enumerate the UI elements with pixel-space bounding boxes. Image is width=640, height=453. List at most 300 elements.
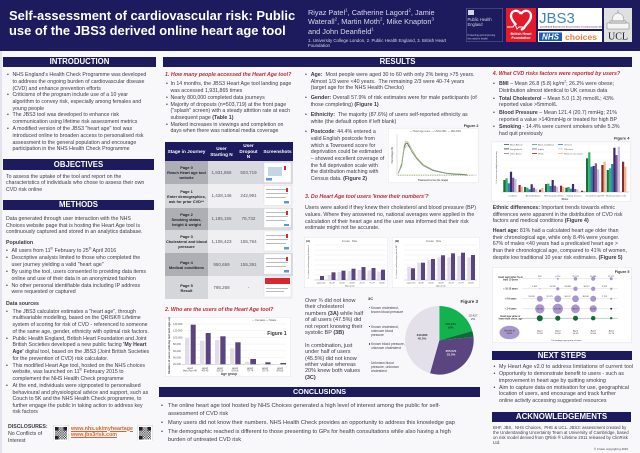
figure 3A: bar chart: 60-69 bbox=[349, 282, 355, 284]
figure 2: line chart: Figure 2 bbox=[464, 124, 478, 128]
table 1: 795,268 bbox=[213, 285, 230, 290]
figure 3B: bar chart: 40-49 bbox=[418, 282, 424, 284]
text: ethnic differences and heart age bbox=[492, 205, 627, 261]
figure 1: bar chart: 40-49 bbox=[202, 369, 209, 373]
table 1: 155,391 bbox=[240, 262, 257, 267]
figure 5: bubble chart: 52,575 bbox=[546, 296, 553, 298]
text: question 4 bullets: had quit previously bbox=[499, 131, 543, 137]
table 1: Page 3 bbox=[180, 234, 193, 239]
figure 1: bar chart: 60,000 bbox=[173, 349, 181, 353]
text: ethnic differences and heart age: Heart age: 81% had a calculated heart age older than bbox=[493, 228, 618, 234]
text: postcode: the distribution matching with bbox=[311, 169, 378, 175]
text: question 3 intro: calculation of their heart age and the user was informed that their risk bbox=[305, 219, 469, 225]
text: next steps bullets: My Heart Age v2.0 to address limitations of current tool bbox=[499, 364, 633, 370]
figure 1: bar chart: aged bbox=[187, 367, 193, 370]
figure 5: bubble chart: 30-39 bbox=[536, 333, 543, 335]
figure 1: bar chart: aged bbox=[277, 367, 283, 370]
text: introduction bullets: young people bbox=[12, 106, 44, 112]
text: question 1 bullets: ("splash" screen) with a steady attrition rate at each bbox=[170, 108, 290, 114]
text: ethnic differences and heart age: than their chronological age, compared to 41% of women, bbox=[493, 248, 627, 254]
text: question 1 bullets: Marked increases in viewings and completion on bbox=[170, 122, 283, 128]
text: next steps bullets: location of users, and encourage and track further bbox=[499, 391, 616, 397]
heading: next steps bbox=[492, 351, 632, 360]
figure 4: bar chart: White or not stated bbox=[564, 152, 583, 156]
figure 5: bubble chart: 70-74 bbox=[608, 333, 614, 335]
figure 3C: legend: 3C bbox=[368, 296, 373, 301]
text: disclosures: No Conflicts of bbox=[8, 431, 42, 437]
text: objectives: characteristics of individuals who chose to assess their own bbox=[6, 180, 144, 186]
text: know your numbers: systolic BP (3B) bbox=[305, 330, 344, 336]
text: postcode: Postcode: 44.4% entered a bbox=[311, 129, 376, 135]
figure 5: bubble chart: + 1-4 years bbox=[504, 307, 517, 310]
figure 1: bar chart: 50-59 bbox=[217, 369, 224, 373]
figure 5: bubble chart: Aged bbox=[572, 330, 578, 332]
text: question 4 bullets bbox=[493, 80, 620, 137]
text: methods: were requested or captured bbox=[12, 289, 76, 295]
figure 3C: legend: Known blood pressure, bbox=[371, 342, 405, 346]
authors: Riyaz Patel1, Catherine Lagord2, Jamie bbox=[308, 8, 435, 17]
text: question 3 intro: values. Where they answered no, national averages were applied in the bbox=[305, 212, 474, 218]
title: Self-assessment of cardiovascular risk: Public bbox=[9, 8, 295, 23]
text: introduction bullets: introduced online to broaden access to personalised risk bbox=[12, 133, 144, 139]
figure 5: bubble chart: 40-49 bbox=[554, 333, 561, 335]
copyright: © Crown copyright ig 2016 bbox=[594, 447, 628, 451]
text: conclusions bullets: The online heart age tool hosted by NHS Choices generated a high level of interest among the public for self- bbox=[168, 403, 440, 409]
text: next steps bullets: Aim to capture data on motivation for use, geographical bbox=[499, 385, 629, 391]
text: methods: At the end, individuals were signposted to personalised bbox=[12, 383, 141, 389]
affiliations: 1. University College London, 2. Public Health England, 3. British Heart bbox=[308, 38, 446, 43]
figure 5: bubble chart: 22,175 bbox=[608, 276, 615, 278]
figure 1: bar chart: Age group bbox=[221, 372, 237, 376]
text: methods: of the same age, gender, ethnicity with optimal risk factors. bbox=[12, 329, 149, 335]
text: methods: Descriptive analysis limited to those who completed the bbox=[12, 255, 140, 261]
figure 3B: bar chart: aged <40 bbox=[407, 281, 416, 284]
text: know your numbers: 20% knew both values bbox=[305, 368, 360, 374]
figure 3B: bar chart: 80-85 bbox=[468, 282, 474, 284]
logo: Public Health England bbox=[466, 8, 503, 42]
text: introduction bullets: NHS England's Health Check Programme was developed bbox=[12, 72, 146, 78]
text: next steps bullets: online activity accessing suggested resources bbox=[499, 398, 606, 404]
text: postcode: – showed excellent coverage of bbox=[311, 156, 384, 162]
figure 5: bubble chart: 2,795 bbox=[601, 296, 607, 298]
text: question 4 bullets: Smoking - 14.4% were current smokers while 5.3% bbox=[499, 124, 620, 130]
text: question 1 bullets: Nearly 800,000 completed data journeys bbox=[170, 95, 265, 101]
text: question 4 bullets: reported value >5mmol/L bbox=[499, 102, 557, 108]
text: methods: Age' digital tool, based on the JBS3 (Joint British Societies bbox=[12, 349, 149, 355]
text: acknowledgements: the Understanding Uncertainty Team at University of Cambridge, based bbox=[493, 430, 629, 435]
logo: British Heart Foundation: Foundation bbox=[511, 36, 530, 40]
text: conclusions bullets: Many users did not know their numbers. NHS Health Check provides an opportunity to address this knowledge gap bbox=[168, 420, 455, 426]
table 1: 503,719 bbox=[240, 170, 257, 175]
text: methods: multivariable modelling, based on the QRISK® Lifetime bbox=[12, 315, 141, 321]
logo: British Heart Foundation bbox=[506, 8, 536, 42]
figure 3C: pie chart: 145,221 bbox=[445, 322, 456, 326]
text: disclosures: DISCLOSURES: bbox=[8, 424, 48, 430]
figure 3C: pie chart: Figure 3 bbox=[460, 299, 478, 304]
logo: JBS3 bbox=[538, 8, 602, 29]
text: introduction bullets: assessment to the general population and encourage bbox=[12, 140, 136, 146]
text: know your numbers: (45.5%) did not know bbox=[305, 356, 357, 362]
text: acknowledgements: on risk model derived from QRisk ® Lifetime 2011 released by ClinRisk bbox=[493, 435, 628, 440]
figure 3C: legend bbox=[368, 296, 405, 372]
heading: methods bbox=[3, 200, 154, 210]
figure 5: bubble chart: Aged bbox=[590, 330, 595, 332]
logo: Public Health England: Public Health bbox=[468, 17, 492, 22]
table 1: 950,659 bbox=[213, 262, 230, 267]
text: introduction bullets: participation in the NHS Health Check Programme bbox=[12, 146, 130, 152]
logo: NHS choices bbox=[538, 31, 602, 42]
text: ethnic differences and heart age: differences were apparent in the distribution of CVD risk bbox=[493, 212, 622, 218]
text: disclosures: Interest bbox=[8, 438, 26, 444]
figure 5: bubble chart: 109,981 bbox=[554, 308, 562, 310]
table 1: Page 4 bbox=[180, 260, 193, 264]
figure 4: bar chart: Risks bbox=[562, 198, 569, 201]
figure 5: bubble chart: Aged bbox=[608, 330, 613, 332]
logo: Public Health England: Protecting and improving bbox=[468, 34, 496, 37]
text: acknowledgements: Ltd. bbox=[493, 440, 500, 445]
figure 3B: bar chart: 75-79 bbox=[458, 282, 464, 284]
figure 1: bar chart: 40,000 bbox=[173, 356, 181, 360]
text: introduction bullets: algorithm to convey risk, especially among females and bbox=[12, 99, 141, 105]
figure 4: bar chart: % of users reporting/experiencing bbox=[495, 151, 498, 184]
text: ethnic differences and heart age: factors and medical conditions (Figure 4) bbox=[493, 218, 589, 224]
title: use of the JBS3 derived online heart age tool bbox=[9, 23, 286, 38]
figure 5: bubble chart: 86,735 bbox=[536, 308, 543, 310]
figure 5: bubble chart: 30,517 bbox=[583, 286, 590, 288]
icon: QR code right bbox=[137, 425, 153, 441]
text: age, gender, ethnicity: Age: Most people were aged 30 to 60 with only 2% being >75 years. bbox=[311, 72, 475, 78]
text: methods: complement the NHS Health Check programme bbox=[12, 376, 124, 382]
text: conclusions bullets bbox=[161, 403, 455, 443]
text: conclusions bullets: assessment of CVD risk bbox=[168, 411, 228, 417]
text: next steps bullets: improvement in heart age by quitting smoking bbox=[499, 378, 606, 384]
figure 4: bar chart: Kidney disease bbox=[567, 196, 582, 198]
figure 3A: bar chart: 75-79 bbox=[369, 282, 375, 284]
figure 5: bubble chart: 56,137 bbox=[564, 296, 571, 298]
heading: introduction: INTRODUCTION bbox=[50, 57, 109, 66]
table 1: Page 2 bbox=[180, 212, 193, 216]
heading: acknowledgements: ACKNOWLEDGEMENTS bbox=[516, 412, 607, 421]
figure 5: bubble chart: 22,573 bbox=[572, 276, 579, 278]
figure 3C: pie chart: 343,880 bbox=[417, 333, 427, 337]
authors bbox=[308, 8, 435, 36]
text: question 4 bullets: Blood Pressure – Mean 121.4 (20.7) mmHg; 21% bbox=[499, 110, 617, 116]
text: question 3 intro: estimate might not be accurate. bbox=[305, 225, 380, 231]
figure 4: bar chart: Bangladeshi bbox=[510, 149, 523, 151]
text: question 1 bullets: was accessed 1,931,865 times bbox=[170, 88, 242, 94]
icon: QR code left bbox=[53, 425, 69, 441]
table 1: User bbox=[216, 146, 227, 151]
text: question 1 bullets: Majority of dropouts (n=503,719) at the front page bbox=[170, 102, 286, 108]
table 1: Stage in Journey bbox=[168, 149, 205, 154]
text: know your numbers: under half of users bbox=[305, 349, 351, 355]
text: ethnic differences and heart age: their chronological age, while only 8.4% were younger. bbox=[493, 235, 619, 241]
figure 1: bar chart: less than 40 bbox=[183, 369, 198, 373]
figure 1: bar chart: aged bbox=[202, 367, 208, 370]
logo: NHS choices: choices bbox=[565, 32, 597, 42]
text: postcode: Census data. (Figure 2) bbox=[311, 176, 367, 182]
figure 3C: pie chart: 33.5% bbox=[447, 353, 456, 357]
figure 2: line chart: Percentage (%) bbox=[391, 146, 394, 163]
table 1: Page 0 bbox=[180, 165, 193, 170]
figure 4: bar chart: Matching Statin CVD bbox=[606, 194, 627, 198]
table 1: Starting N bbox=[210, 152, 233, 156]
figure 3A: bar chart: (A) bbox=[306, 239, 310, 243]
figure 3C: pie chart: 15,427 bbox=[468, 314, 478, 318]
figure 5: bubble chart: 2,305 bbox=[531, 286, 537, 288]
text: ethnic differences and heart age: Ethnic differences: Important trends towards ethnic bbox=[493, 205, 615, 211]
figure 3A: bar chart: Female Male bbox=[342, 240, 358, 243]
text: question 4 bullets: Distribution almost identical to UK census data bbox=[499, 88, 607, 94]
table 1: 155,764 bbox=[240, 239, 257, 244]
table screenshots bbox=[264, 162, 292, 298]
table 1 bbox=[165, 142, 293, 299]
links: www.nhs.uk/myheartage bbox=[71, 426, 133, 432]
text: age, gender, ethnicity: white (the default option if left blank) bbox=[311, 119, 396, 125]
figure 3B: bar chart: % of users not knowing systolic BP bbox=[395, 244, 398, 279]
figure 5: bubble chart: 842 bbox=[538, 276, 542, 278]
text: objectives bbox=[6, 174, 144, 193]
text: know your numbers: of all users (47.5%) did bbox=[305, 317, 361, 323]
text: methods: This modified Heart Age tool, hosted on the NHS choices bbox=[12, 363, 145, 369]
text: age, gender, ethnicity: Almost 1/3 were <40 years. The remaining 2/3 were 40-74 years bbox=[311, 79, 464, 85]
text: age, gender, ethnicity: Ethnicity: The majority (87.6%) of users self-reported ethnicity as bbox=[311, 112, 468, 118]
text: conclusions bullets: The demographic reached is different to those presenting to GPs for health consultations while also having a high bbox=[168, 429, 451, 435]
table 1: Cholesterol and blood bbox=[166, 239, 207, 244]
affiliations: Foundation bbox=[308, 43, 330, 48]
left edge strip bbox=[0, 51, 2, 453]
figure 3B: bar chart: Female Male bbox=[426, 240, 442, 243]
text: methods: All users from 11th February to 25th April 2016 bbox=[12, 246, 116, 254]
text: postcode: valid English postcode from bbox=[311, 136, 375, 142]
logo: Public Health England: England bbox=[468, 22, 483, 27]
text: conclusions bullets: burden of untreated CVD risk bbox=[168, 437, 241, 443]
heading: results: RESULTS bbox=[380, 57, 415, 66]
text: objectives: CVD risk online bbox=[6, 187, 42, 193]
figure 5: bubble chart: 60-69 bbox=[590, 333, 596, 335]
figure 3C: legend: Unknown blood bbox=[371, 360, 394, 364]
table 1: 1,106,423 bbox=[211, 239, 232, 244]
figure 3C: pie chart: 19% bbox=[447, 326, 454, 330]
text: introduction bullets: to address the ongoing burden of cardiovascular disease bbox=[12, 79, 144, 85]
text: methods: website, was launched on 11th February 2015 to bbox=[12, 368, 124, 375]
figure 3B: bar chart: 60-69 bbox=[438, 282, 444, 284]
text: next steps bullets: Opportunity to demonstrate benefit to users - such as bbox=[499, 371, 624, 377]
figure 5: bubble chart: Aged bbox=[555, 330, 560, 332]
figure 4: bar chart: Pakistani bbox=[564, 148, 573, 151]
figure 5: bubble chart: Number of bbox=[504, 330, 514, 332]
text: question 1 bullets: subsequent page (Table 1) bbox=[170, 115, 233, 121]
table 1: - bbox=[248, 285, 249, 290]
text: question 3 intro: Users were asked if they knew their cholesterol and blood pressure (BP) bbox=[305, 205, 476, 211]
figure 1: bar chart: Figure 1 bbox=[267, 331, 287, 337]
table 1: Enter demographics, bbox=[167, 194, 206, 198]
figure 5: bubble chart bbox=[492, 267, 632, 343]
heading: next steps: NEXT STEPS bbox=[538, 351, 586, 360]
text: question 1 bullets: In 14 months, the JBS3 Heart Age tool landing page bbox=[170, 81, 291, 87]
text: question 4 bullets: reported a value >140mmHg or treated for high BP bbox=[499, 117, 617, 123]
figure 4: bar chart: Black Caribbean bbox=[538, 144, 555, 146]
figure 5: bubble chart: 24,688 bbox=[564, 286, 571, 288]
text: know your numbers bbox=[305, 298, 364, 381]
table 1: Page 5 bbox=[180, 282, 193, 288]
figure 3C: legend: Known cholesterol, bbox=[371, 324, 399, 328]
logo: JBS3: JBS3 bbox=[539, 10, 575, 27]
table 1: website bbox=[179, 175, 194, 180]
question 3 heading: 3. Do Heart Age tool users 'know their numbers'? bbox=[305, 194, 429, 200]
text: next steps bullets bbox=[494, 364, 633, 404]
affiliations bbox=[308, 38, 446, 48]
text: introduction bullets bbox=[7, 72, 146, 152]
text: methods: By using the tool, users consented to providing data items bbox=[12, 269, 146, 275]
text: question 1 bullets bbox=[166, 81, 292, 134]
text: ethnic differences and heart age: 67% of males <40 years had a predicated heart age > bbox=[493, 241, 618, 247]
figure 4: bar chart: Atrial fibrillation bbox=[526, 194, 541, 198]
figure 4: bar chart: Black African bbox=[510, 144, 523, 146]
figure 3B: bar chart: (B) bbox=[395, 239, 399, 243]
text: introduction bullets: (CVD) and enhance prevention efforts bbox=[12, 86, 101, 92]
table 1: height & weight bbox=[172, 222, 201, 226]
figure 3C: legend: known blood pressure bbox=[371, 310, 403, 314]
text: methods: British Societies developed a new public facing 'My Heart bbox=[12, 342, 147, 348]
figure 5: bubble chart: 50,765 bbox=[590, 308, 597, 310]
figure 3C: pie chart: 255,521 bbox=[446, 349, 456, 353]
text: age, gender, ethnicity: (target age for the NHS Health Checks) bbox=[311, 85, 404, 91]
text: know your numbers: their cholesterol bbox=[305, 304, 344, 310]
figure 4: bar chart: Treated for high BP bbox=[586, 194, 605, 198]
figure 5: bubble chart: 13,700 bbox=[549, 286, 556, 288]
figure 3B: bar chart: 50-59 bbox=[428, 282, 434, 284]
figure 3A: bar chart: % of users not knowing cholesterol bbox=[307, 245, 310, 279]
table 1: 78,732 bbox=[242, 216, 255, 221]
text: age, gender, ethnicity: those completing) (Figure 1) bbox=[311, 102, 379, 108]
figure 4: bar chart bbox=[492, 136, 631, 202]
text: know your numbers: In combination, just bbox=[305, 343, 352, 349]
text: methods: Couch to 5K and the NHS Health Check programme, to bbox=[12, 396, 141, 402]
text: methods: Population bbox=[6, 240, 33, 246]
figure 5: bubble chart: Figure 5 bbox=[614, 270, 629, 274]
figure 3B: bar chart: Age group bbox=[436, 284, 447, 288]
text: methods: Public Health England, British Heart Foundation and Joint bbox=[12, 336, 146, 342]
table 1: Dropout bbox=[239, 149, 258, 154]
figure 1: bar chart: aged bbox=[247, 367, 253, 370]
figure 5: bubble chart: users bbox=[506, 332, 513, 335]
table 1: Smoking status, bbox=[171, 216, 202, 222]
text: question 3 intro bbox=[305, 205, 476, 231]
question 1 heading: 1. How many people accessed the Heart Age tool? bbox=[165, 72, 291, 78]
table 1: User bbox=[243, 143, 254, 148]
figure 4: bar chart: Rheumatoid arthritis bbox=[544, 194, 565, 198]
figure 2: line chart: Townsend score (in range) bbox=[418, 179, 448, 182]
figure 3A: bar chart: 80-85 bbox=[379, 282, 385, 284]
figure 5: bubble chart: 26,386 bbox=[590, 276, 597, 278]
figure 1: bar chart: 100,000 bbox=[173, 335, 183, 339]
text: know your numbers: either value whereas bbox=[305, 362, 356, 368]
text: methods: continuously captured and stored in an analytics database. bbox=[6, 229, 143, 235]
figure 3C: pie chart: 45.5% bbox=[418, 337, 427, 341]
logo: NHS choices: NHS bbox=[542, 32, 559, 41]
text: know your numbers: Over ¾ did not know bbox=[305, 298, 355, 304]
figure 5: bubble chart: 50-59 bbox=[572, 333, 579, 335]
figure 1: bar chart: aged bbox=[232, 367, 238, 370]
table 1: Result bbox=[181, 288, 192, 292]
table 1: Reach Heart age tool bbox=[167, 170, 206, 175]
heading: acknowledgements bbox=[492, 412, 631, 422]
text: postcode: the full deprivation scale with bbox=[311, 163, 378, 169]
logo: British Heart Foundation: British Heart bbox=[510, 32, 532, 36]
text: methods: Data sources bbox=[6, 301, 39, 307]
text: methods: online and use of their data in an anonymized fashion bbox=[12, 276, 136, 282]
figure 5: bubble chart: 29,059 bbox=[528, 296, 535, 298]
figure 5: bubble chart: lower than chron. age bbox=[498, 317, 523, 320]
text: methods: The JBS3 calculator estimates a "heart age", through bbox=[12, 309, 136, 315]
figure 1: bar chart: Number of users utilising tool and sign-up* bbox=[167, 317, 171, 374]
heading: objectives: OBJECTIVES bbox=[54, 160, 103, 169]
figure 1: bar chart: 120,000 bbox=[173, 329, 183, 333]
text: methods: further engage the public in taking action to address key bbox=[12, 403, 143, 409]
figure 1: bar chart: aged bbox=[217, 367, 223, 370]
text: acknowledgements: BHF, JBS, NHS Choices, PHE & UCL. JBS3: assessment created by bbox=[493, 425, 626, 430]
text: introduction bullets: The JBS3 tool was developed to enhance risk bbox=[12, 112, 119, 118]
table 1: N bbox=[247, 154, 250, 159]
text: postcode bbox=[305, 129, 384, 182]
text: objectives: To assess the uptake of the tool and report on the bbox=[6, 174, 121, 180]
figure 4: bar chart: Figure 4 bbox=[614, 136, 630, 140]
text: ethnic differences and heart age: despite low traditional 10 year risk estimates. (Figure 5) bbox=[493, 255, 623, 261]
table 1: ask for prior CVD** bbox=[169, 198, 204, 204]
text: know your numbers: not report knowing their bbox=[305, 324, 362, 330]
table 1: 1,931,865 bbox=[211, 170, 232, 175]
figure 3C: pie chart: 2% bbox=[471, 317, 475, 321]
figure 3C: legend: pressure, unknown bbox=[371, 364, 399, 368]
heading: methods: METHODS bbox=[59, 200, 98, 209]
figure 3B: bar chart bbox=[392, 237, 480, 288]
figure 1: bar chart: 80,000 bbox=[173, 342, 181, 346]
question 2 heading: 2. Who are the users of the Heart Age tool? bbox=[165, 307, 273, 313]
heading: introduction bbox=[3, 57, 156, 67]
table 1: Screenshots bbox=[263, 149, 292, 154]
figure 5: bubble chart: 4,170 bbox=[555, 276, 561, 278]
text: introduction bullets: A modified version of the JBS3 "heart age" tool was bbox=[12, 126, 132, 132]
text: age, gender, ethnicity bbox=[305, 72, 477, 125]
figure 1: bar chart: 75-79 bbox=[262, 369, 269, 373]
table 1: 1,428,146 bbox=[211, 193, 232, 198]
text: postcode: which a Townsend score for bbox=[311, 143, 375, 149]
table 1: Medical conditions bbox=[169, 264, 204, 270]
text: know your numbers: numbers (3A) while half bbox=[305, 311, 363, 317]
logo: UCL bbox=[604, 8, 632, 42]
figure 5: bubble chart: + 5-9 years bbox=[504, 298, 517, 300]
figure 5: bubble chart: 38,108 bbox=[582, 296, 589, 298]
figure 4: bar chart: Diabetes bbox=[509, 194, 518, 198]
figure 5: bubble chart: + 10-15 years bbox=[503, 288, 518, 290]
text: introduction bullets: Criticisms of the program include use of a 10 year bbox=[12, 92, 128, 98]
text: methods: Data generated through user interaction with the NHS bbox=[6, 216, 131, 222]
figure 1: bar chart: 140,000 bbox=[173, 322, 183, 326]
table 1: pressure bbox=[178, 244, 195, 249]
figure 1: bar chart: 70-74 bbox=[247, 369, 254, 373]
figure 3A: bar chart bbox=[304, 237, 388, 288]
figure 3B: bar chart: 70-74 bbox=[448, 282, 454, 284]
figure 3C: legend: pressure bbox=[371, 332, 384, 336]
figure 3C: legend: cholesterol bbox=[371, 368, 387, 372]
text: methods: system of scoring for risk of CVD - referenced to someone bbox=[12, 322, 148, 328]
table 1: 1,185,155 bbox=[211, 216, 232, 221]
figure 5: bubble chart: Percentage age group of users bbox=[551, 338, 582, 342]
heading: results bbox=[163, 57, 632, 67]
authors: Waterall2, Martin Moth2, Mike Knapton3 bbox=[308, 17, 434, 26]
figure 1: bar chart: — Females — Males bbox=[252, 318, 277, 322]
